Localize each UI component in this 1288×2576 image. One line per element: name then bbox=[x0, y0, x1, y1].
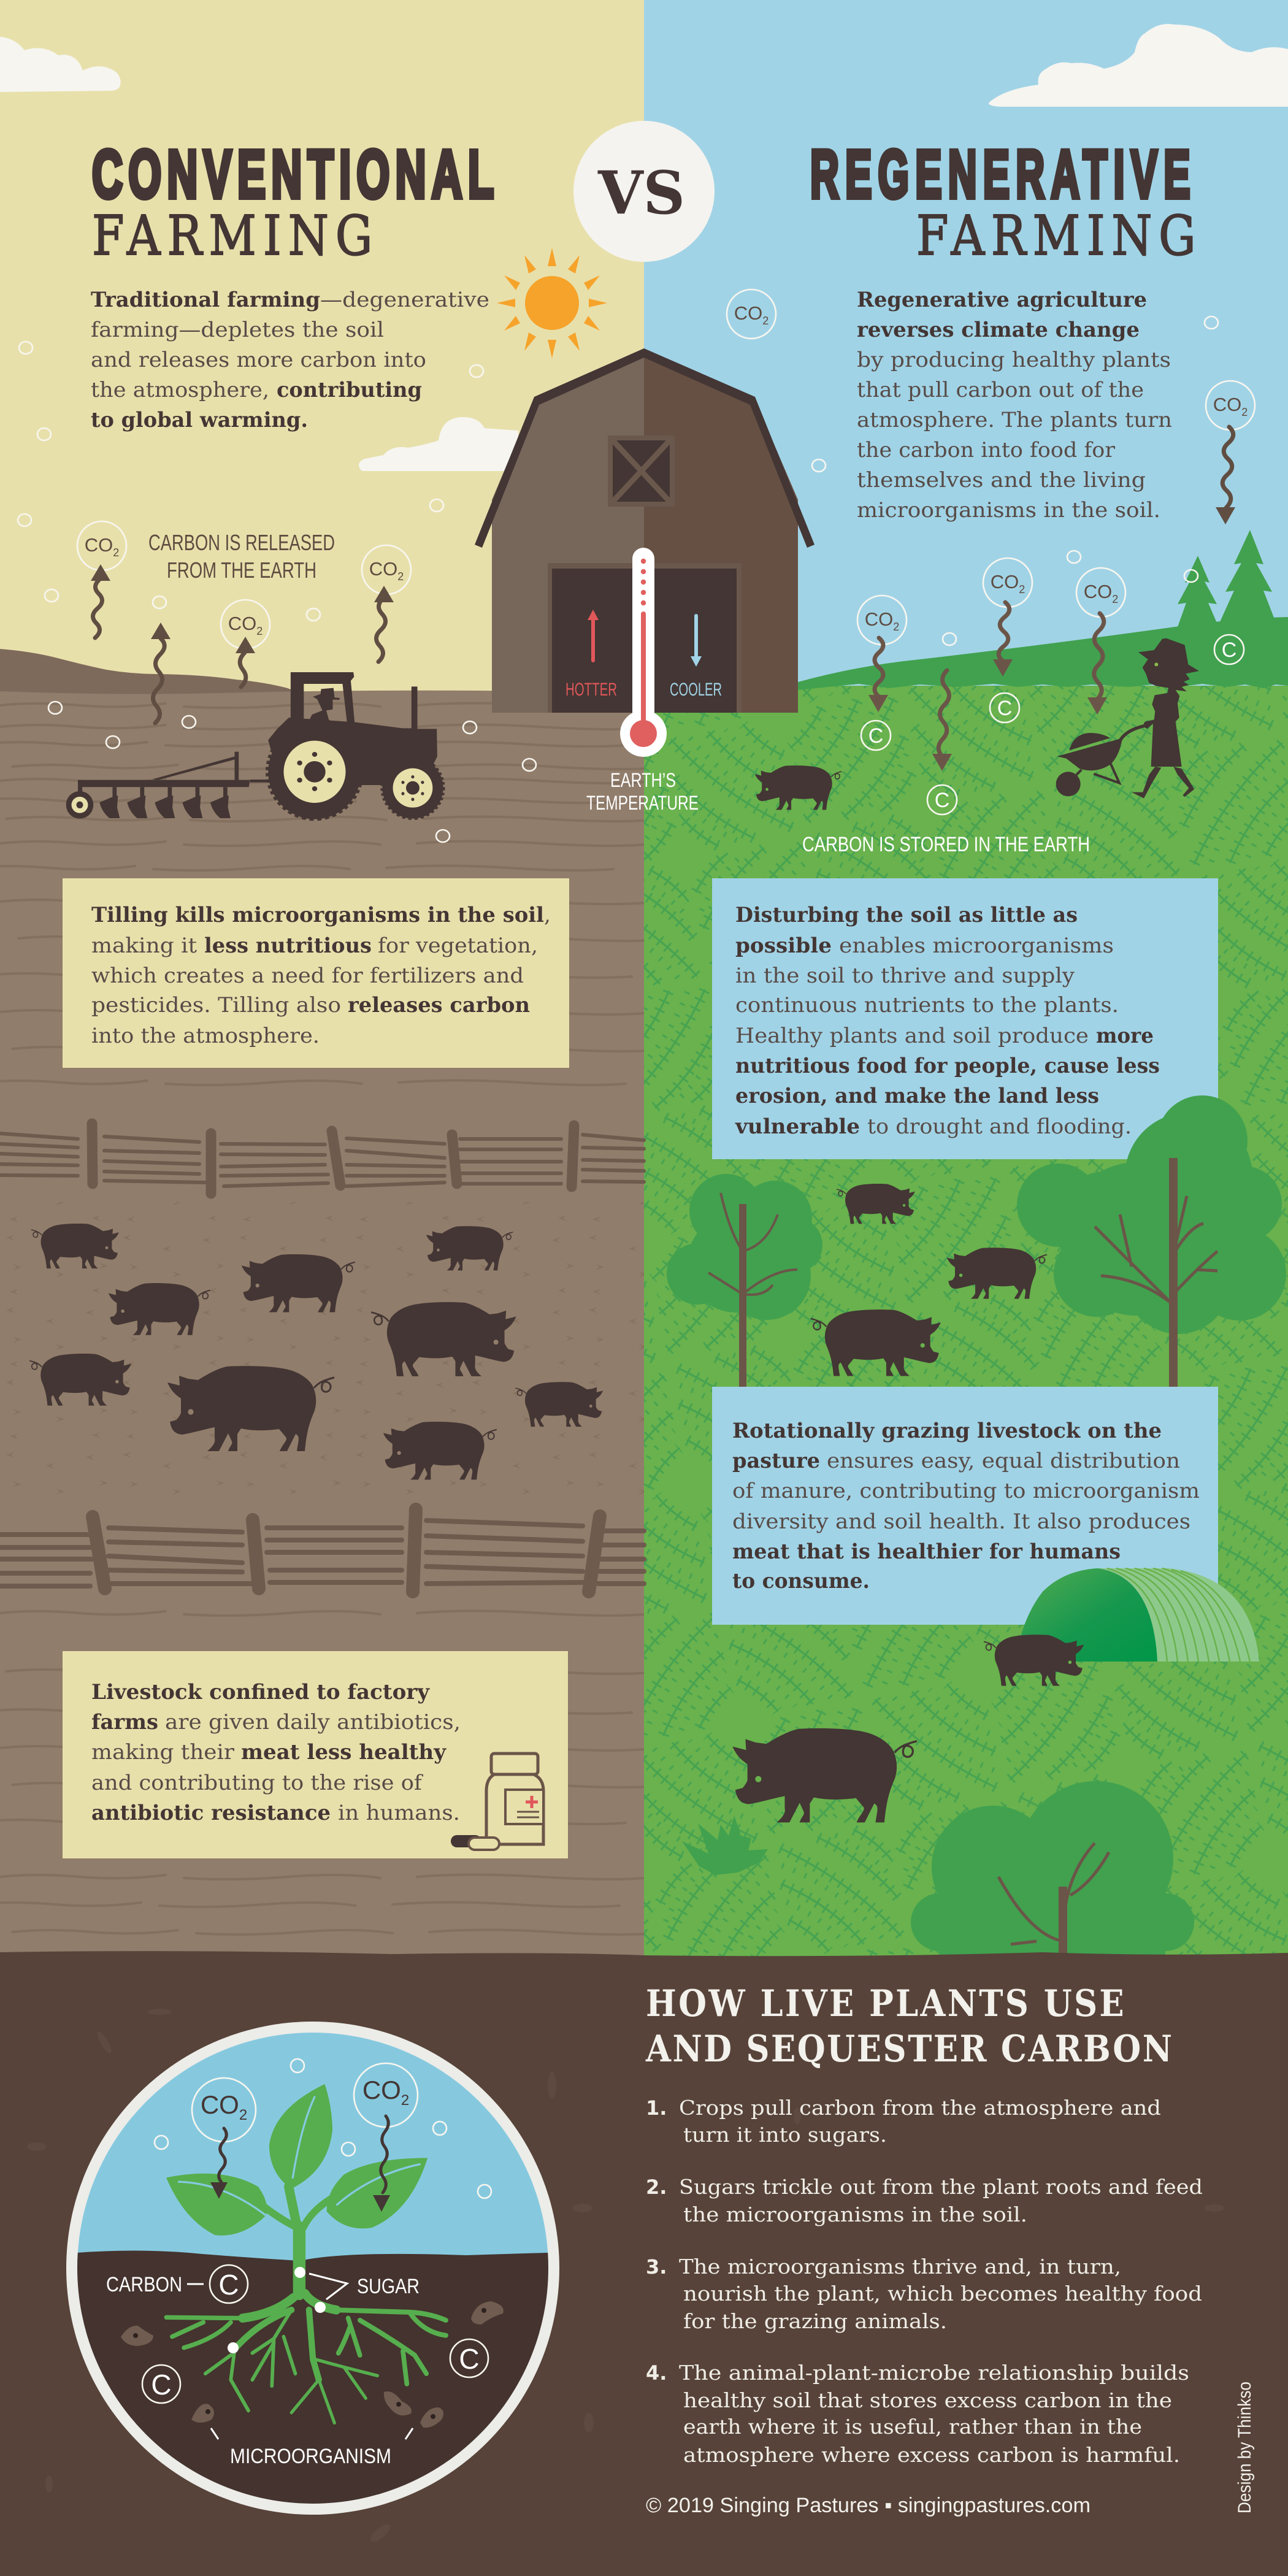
farmer with wheelbarrow bbox=[1056, 638, 1199, 799]
step 4 bbox=[646, 2361, 1189, 2467]
CO2 captured 1: 2 bbox=[893, 621, 899, 633]
step 3: nourish the plant, which becomes healthy food bbox=[683, 2282, 1202, 2306]
title: regenerative farming: FARMING bbox=[916, 204, 1196, 268]
text box: tilling: releases carbon bbox=[348, 993, 530, 1018]
CO2 released 3: CO bbox=[228, 613, 256, 634]
text box: livestock: in humans. bbox=[338, 1801, 460, 1825]
footer credit: © 2019 Singing Pastures ▪ singingpastures.com bbox=[646, 2494, 1091, 2517]
CO2 captured 1 bbox=[857, 596, 907, 712]
heading: how live plants: HOW LIVE PLANTS USE bbox=[646, 1982, 1124, 2025]
step 1 bbox=[646, 2096, 1161, 2147]
grass tuft bbox=[682, 1815, 768, 1875]
pigs grazing bbox=[811, 1184, 1047, 1376]
intro text: conventional: the atmosphere, bbox=[91, 378, 269, 402]
text box: tilling: for vegetation, bbox=[378, 933, 538, 958]
carbon markers C: C bbox=[997, 697, 1012, 720]
text box: rotational grazing: of manure, contributing to microorganism bbox=[732, 1479, 1200, 1503]
text box: livestock: are given daily antibiotics, bbox=[165, 1710, 461, 1735]
VS badge bbox=[573, 121, 715, 262]
text box: livestock: antibiotic resistance bbox=[91, 1801, 331, 1825]
pig by hoop house bbox=[984, 1635, 1084, 1686]
step 1: 1. bbox=[646, 2096, 667, 2120]
pig group: confined pigs bbox=[29, 1224, 603, 1479]
CO2 released 1: CO bbox=[85, 534, 113, 556]
carbon markers C: C bbox=[935, 789, 949, 812]
arrow: cooler bbox=[691, 614, 702, 667]
tree left bbox=[667, 1174, 822, 1387]
icon: sun bbox=[497, 248, 607, 358]
CO2 bubble lone: 2 bbox=[762, 315, 769, 327]
CO2 released 4: CO bbox=[369, 558, 397, 580]
CO2 left arrow bbox=[192, 2078, 256, 2199]
CO2 released 1: 2 bbox=[113, 546, 119, 559]
intro text: regenerative: Regenerative agriculture bbox=[857, 288, 1147, 312]
intro text: regenerative: reverses climate change bbox=[857, 318, 1140, 342]
intro text: regenerative: microorganisms in the soil. bbox=[857, 498, 1160, 523]
arrow: hotter bbox=[588, 610, 599, 662]
CO2 captured 4: CO bbox=[1084, 581, 1112, 602]
CO2 right arrow: CO bbox=[362, 2076, 401, 2104]
background: regenerative sky bbox=[644, 0, 1288, 699]
text box: rotational grazing bbox=[712, 1387, 1218, 1625]
text box: disturbing the soil: to drought and flooding. bbox=[867, 1114, 1132, 1139]
heading: how live plants: AND SEQUESTER CARBON bbox=[645, 2028, 1172, 2071]
text box: tilling: which creates a need for fertilizers and bbox=[91, 964, 524, 988]
icon: medicine bottle and pills bbox=[451, 1754, 543, 1850]
fence: bottom bbox=[0, 1509, 644, 1592]
CO2 bubble lone: CO bbox=[734, 302, 762, 324]
label: sugar: SUGAR bbox=[357, 2275, 420, 2298]
label: earth's temperature: TEMPERATURE bbox=[586, 792, 699, 814]
cloud top right bbox=[989, 24, 1288, 107]
CO2 captured 1: CO bbox=[865, 608, 893, 630]
step 2: Sugars trickle out from the plant roots and feed bbox=[679, 2175, 1203, 2199]
step 3 bbox=[646, 2255, 1202, 2333]
text box: disturbing the soil: vulnerable bbox=[735, 1114, 860, 1139]
large pig bbox=[732, 1728, 917, 1822]
label: earth's temperature bbox=[586, 769, 699, 814]
intro text: regenerative: that pull carbon out of the bbox=[857, 378, 1144, 402]
intro text: conventional: —degenerative bbox=[320, 288, 489, 312]
label: earth's temperature: EARTH’S bbox=[610, 769, 676, 791]
step 4: atmosphere where excess carbon is harmful. bbox=[683, 2443, 1180, 2467]
intro text: regenerative: the carbon into food for bbox=[857, 438, 1116, 462]
bottom soil panel bbox=[0, 1951, 1288, 2576]
step 4: The animal-plant-microbe relationship builds bbox=[679, 2361, 1189, 2385]
intro text: regenerative: atmosphere. The plants turn bbox=[857, 408, 1172, 432]
CO2 captured 3: CO bbox=[991, 571, 1019, 592]
text box: rotational grazing: to consume. bbox=[732, 1569, 870, 1593]
CO2 right arrow bbox=[354, 2063, 418, 2212]
CO2 released 3 bbox=[221, 600, 270, 687]
CO2 released 4: 2 bbox=[397, 570, 404, 583]
label: microorganism bbox=[211, 2428, 413, 2468]
text box: disturbing the soil bbox=[712, 878, 1218, 1159]
VS badge: VS bbox=[597, 158, 685, 228]
text box: tilling: Tilling kills microorganisms in the soil bbox=[91, 903, 544, 927]
plant diagram circle bbox=[61, 2018, 564, 2515]
step 2 bbox=[646, 2175, 1203, 2226]
CO2 released 4 bbox=[362, 545, 411, 662]
step 4: earth where it is useful, rather than in the bbox=[683, 2415, 1142, 2439]
title: regenerative farming: REGENERATIVE bbox=[810, 137, 1190, 212]
label: carbon: CARBON bbox=[106, 2273, 182, 2296]
pine trees bbox=[1177, 530, 1278, 629]
step 4: healthy soil that stores excess carbon in the bbox=[683, 2388, 1172, 2412]
step 3: The microorganisms thrive and, in turn, bbox=[679, 2255, 1121, 2279]
title: conventional farming bbox=[92, 137, 494, 268]
green pasture field bbox=[644, 686, 1288, 1961]
text box: disturbing the soil: possible bbox=[735, 933, 832, 958]
text box: tilling: pesticides. Tilling also bbox=[91, 993, 341, 1018]
label: carbon is released: FROM THE EARTH bbox=[167, 558, 316, 583]
label: carbon is released bbox=[148, 530, 335, 583]
cloud by barn bbox=[359, 417, 518, 471]
text box: livestock: and contributing to the rise of bbox=[91, 1771, 423, 1795]
step 1: Crops pull carbon from the atmosphere and bbox=[679, 2096, 1161, 2120]
CO2 released 2 bbox=[151, 623, 171, 723]
text box: livestock bbox=[63, 1651, 568, 1858]
left hill bbox=[0, 649, 307, 696]
carbon markers C: C bbox=[1222, 638, 1236, 662]
label: carbon is stored: CARBON IS STORED IN THE EARTH bbox=[802, 833, 1090, 856]
text box: tilling: making it bbox=[91, 933, 197, 958]
carbon markers in soil bbox=[142, 2339, 488, 2403]
microorganisms bbox=[121, 2301, 504, 2428]
text box: disturbing the soil: continuous nutrients to the plants. bbox=[735, 993, 1119, 1018]
text box: tilling: into the atmosphere. bbox=[91, 1024, 320, 1048]
CO2 captured 4 bbox=[1076, 568, 1125, 715]
text box: livestock: Livestock confined to factory bbox=[91, 1680, 430, 1704]
floating bubbles bbox=[18, 316, 1218, 842]
background: conventional sky bbox=[0, 0, 644, 699]
sugar dots bbox=[228, 2267, 326, 2353]
text box: rotational grazing: pasture bbox=[732, 1449, 820, 1473]
step 4: 4. bbox=[646, 2361, 667, 2385]
CO2 captured 3: 2 bbox=[1019, 583, 1025, 596]
hoop house bbox=[1016, 1568, 1259, 1662]
intro text: conventional: to global warming. bbox=[91, 408, 308, 432]
heading: how live plants bbox=[645, 1982, 1172, 2071]
title: conventional farming: FARMING bbox=[92, 204, 372, 268]
bubbles in circle bbox=[155, 2059, 491, 2198]
CO2 captured 2 bbox=[932, 670, 952, 771]
cloud top left bbox=[0, 37, 121, 92]
text box: livestock: meat less healthy bbox=[241, 1740, 447, 1765]
CO2 released 3: 2 bbox=[256, 625, 263, 637]
text box: disturbing the soil: Healthy plants and soil produce bbox=[735, 1024, 1089, 1048]
text box: livestock: making their bbox=[91, 1740, 235, 1765]
step 3: for the grazing animals. bbox=[683, 2309, 947, 2333]
label: hotter: HOTTER bbox=[565, 680, 617, 700]
carbon markers C: C bbox=[868, 724, 883, 748]
CO2 captured right: 2 bbox=[1241, 406, 1248, 418]
text box: disturbing the soil: more bbox=[1096, 1024, 1154, 1048]
text box: disturbing the soil: erosion, and make the land less bbox=[735, 1084, 1099, 1108]
plant with roots bbox=[166, 2084, 446, 2423]
intro text: conventional bbox=[91, 288, 489, 432]
text box: rotational grazing: diversity and soil health. It also produces bbox=[732, 1509, 1190, 1534]
label: microorganism: MICROORGANISM bbox=[230, 2445, 391, 2468]
label: sugar bbox=[309, 2274, 420, 2299]
text box: rotational grazing: ensures easy, equal distribution bbox=[827, 1449, 1180, 1473]
step 1: turn it into sugars. bbox=[683, 2123, 887, 2147]
intro text: conventional: contributing bbox=[277, 378, 422, 402]
step 2: 2. bbox=[646, 2175, 667, 2199]
label: carbon: C bbox=[218, 2269, 239, 2301]
text box: tilling bbox=[63, 878, 569, 1068]
text box: tilling: , bbox=[544, 903, 551, 927]
text box: livestock: farms bbox=[91, 1710, 158, 1735]
text box: disturbing the soil: in the soil to thrive and supply bbox=[735, 964, 1075, 988]
text box: rotational grazing: Rotationally grazing livestock on the bbox=[732, 1419, 1162, 1443]
label: carbon is released: CARBON IS RELEASED bbox=[148, 530, 335, 555]
title: conventional farming: CONVENTIONAL bbox=[92, 137, 494, 212]
green hill bbox=[798, 617, 1288, 690]
intro text: regenerative: themselves and the living bbox=[857, 468, 1146, 493]
intro text: regenerative: by producing healthy plants bbox=[857, 348, 1171, 372]
intro text: regenerative bbox=[857, 288, 1172, 523]
bush bottom bbox=[911, 1781, 1194, 1957]
pig by barn bbox=[755, 765, 841, 810]
CO2 captured right bbox=[1206, 381, 1255, 524]
text box: rotational grazing: meat that is healthier for humans bbox=[732, 1539, 1121, 1564]
tree right bbox=[1017, 1095, 1286, 1387]
text box: disturbing the soil: Disturbing the soil as little as bbox=[735, 903, 1078, 927]
CO2 left arrow: CO bbox=[201, 2090, 239, 2119]
text box: tilling: less nutritious bbox=[204, 933, 372, 958]
intro text: conventional: farming—depletes the soil bbox=[91, 318, 384, 342]
CO2 bubble lone bbox=[727, 289, 776, 339]
CO2 left arrow: 2 bbox=[239, 2107, 247, 2123]
barn bbox=[475, 348, 815, 713]
CO2 captured 4: 2 bbox=[1112, 593, 1118, 605]
carbon markers C bbox=[861, 635, 1244, 815]
intro text: conventional: Traditional farming bbox=[91, 288, 320, 312]
title: regenerative farming bbox=[810, 137, 1196, 268]
label: cooler: COOLER bbox=[670, 680, 722, 700]
carbon markers in soil: C bbox=[151, 2369, 172, 2401]
tractor and plow bbox=[66, 672, 443, 819]
fence: top bbox=[0, 1124, 644, 1194]
text box: disturbing the soil: enables microorganisms bbox=[839, 933, 1114, 958]
step 3: 3. bbox=[646, 2255, 667, 2279]
design credit: Design by Thinkso bbox=[1235, 2382, 1255, 2513]
label: carbon bbox=[106, 2265, 248, 2303]
text box: disturbing the soil: nutritious food for people, cause less bbox=[735, 1054, 1160, 1078]
thermometer bbox=[620, 548, 667, 757]
intro text: conventional: and releases more carbon into bbox=[91, 348, 426, 372]
carbon markers in soil: C bbox=[459, 2343, 480, 2375]
CO2 captured 3 bbox=[983, 558, 1032, 677]
step 2: the microorganisms in the soil. bbox=[683, 2202, 1027, 2226]
CO2 released 1 bbox=[77, 521, 126, 638]
CO2 captured right: CO bbox=[1213, 394, 1241, 415]
soil field: conventional bbox=[0, 691, 662, 1963]
CO2 right arrow: 2 bbox=[401, 2092, 409, 2109]
